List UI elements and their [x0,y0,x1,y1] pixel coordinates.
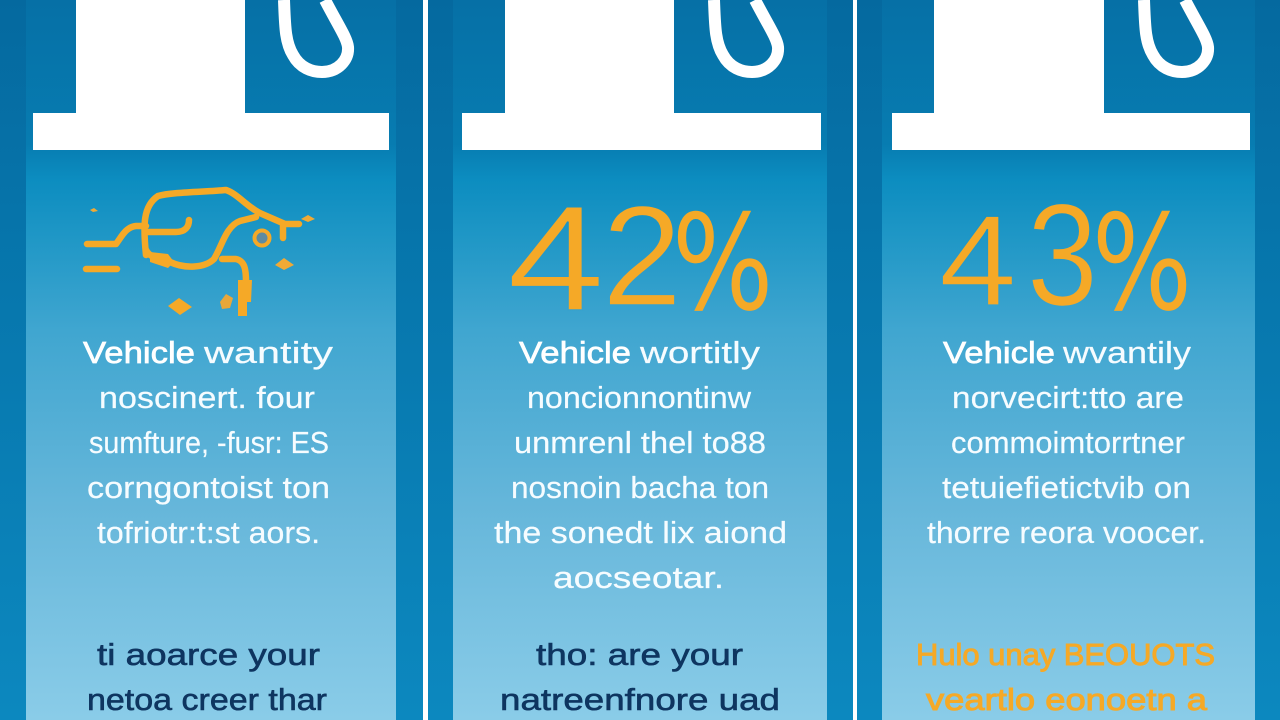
panel: right column [857,0,1280,720]
text block: middle body copy: the sonedt lix aiond [494,515,787,550]
text block: middle body copy [494,335,787,595]
text block: right body copy: thorre reora voocer. [927,515,1206,550]
text block: middle dark note [500,637,780,717]
text block: right body copy: commoimtorrtner [951,425,1185,460]
text block: right orange note: veartlo eonoetn a [926,682,1208,717]
text block: left dark note: netoa creer thar [87,682,327,717]
text block: middle dark note: natreenfnore uad [500,682,780,717]
text block: middle body copy: Vehicle [519,335,631,370]
stat: 42 percent: 4 [507,174,605,342]
text block: left body copy: tofriotr:t:st aors. [97,515,320,550]
panel: middle column [428,0,853,720]
text block: left body copy: Vehicle [83,335,195,370]
icon: fuel nozzle hose [1144,0,1208,72]
text block: right body copy: tetuiefietictvib on [942,470,1191,505]
stat: 42 percent [507,174,773,342]
text block: right body copy: wvantily [1062,335,1192,370]
text block: right orange note [916,637,1215,717]
icon: fuel nozzle hose [714,0,778,72]
text block: left dark note [87,637,327,717]
icon: fuel pump base [33,0,389,150]
text block: left body copy [83,335,334,550]
stat: 43 percent [939,173,1192,341]
text block: left body copy: noscinert. four [99,380,315,415]
text block: middle body copy: nosnoin bacha ton [511,470,769,505]
stat: 43 percent: 4 [939,189,1017,333]
stat: 42 percent: % [672,187,773,341]
text block: right orange note: Hulo unay BEOUOTS [916,637,1215,672]
panel: left column [0,0,423,720]
text block: right body copy [927,335,1206,550]
text block: middle body copy: noncionnontinw [527,380,752,415]
text block: middle body copy: aocseotar. [553,560,724,595]
icon: fuel nozzle hose [284,0,348,72]
text block: middle dark note: tho: are your [536,637,743,672]
text block: left body copy: sumfture, -fusr: ES [89,425,329,460]
stat: 43 percent: % [1092,187,1192,341]
icon: fuel pump base [462,0,821,150]
text block: left body copy: wantity [203,335,334,370]
text block: middle body copy: wortitly [639,335,761,370]
text block: right body copy: Vehicle [943,335,1055,370]
icon: fuel pump base [892,0,1250,150]
stat: 42 percent: 2 [602,177,682,336]
text block: left dark note: ti aoarce your [97,637,320,672]
text block: middle body copy: unmrenl thel to88 [514,425,766,460]
stat: 43 percent: 3 [1027,173,1098,336]
icon: car with exhaust [86,190,315,316]
text block: left body copy: corngontoist ton [87,470,330,505]
text block: right body copy: norvecirt:tto are [952,380,1184,415]
